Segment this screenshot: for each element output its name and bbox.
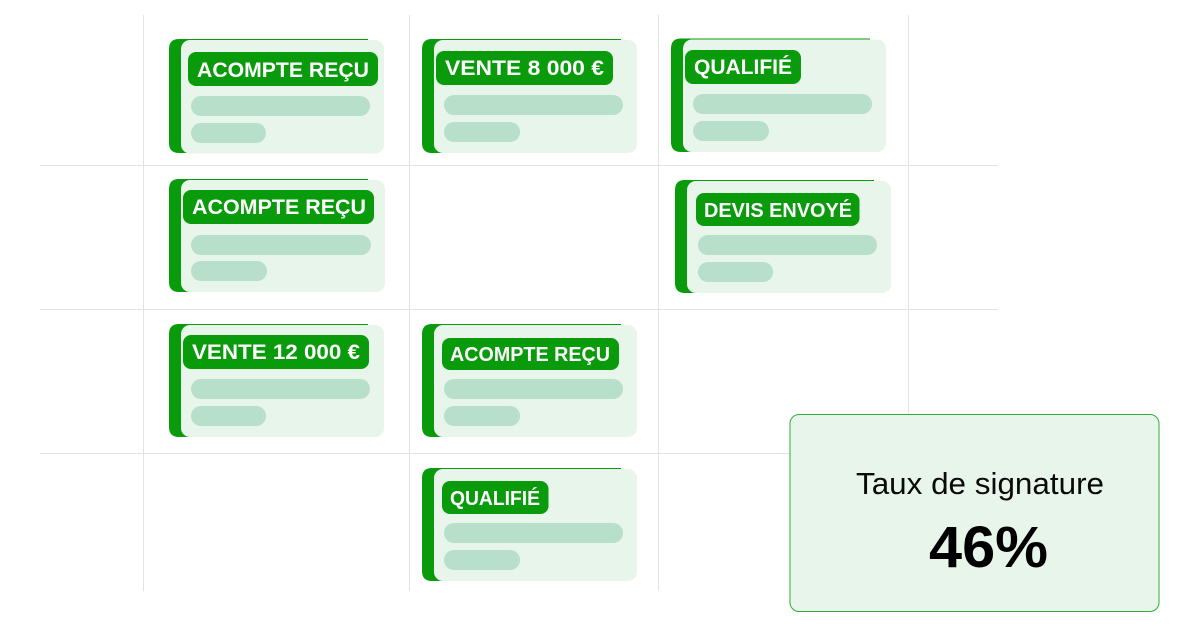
card: acompte reçu, row 1 column 1 bbox=[169, 39, 384, 154]
card: qualifié, row 1 column 3 bbox=[671, 38, 886, 152]
callout: taux de signature bbox=[790, 414, 1159, 612]
card: qualifié, row 4 column 2 bbox=[422, 468, 637, 581]
card: acompte reçu, row 2 column 1: ACOMPTE REÇU bbox=[192, 196, 366, 219]
card: vente 12 000 €, row 3 column 1: VENTE 12 000 € bbox=[192, 341, 360, 364]
callout value: 46% bbox=[929, 515, 1048, 580]
card: vente 8 000 €, row 1 column 2 bbox=[422, 39, 637, 153]
card: devis envoyé, row 2 column 3: DEVIS ENVOYÉ bbox=[704, 199, 852, 222]
card: qualifié, row 1 column 3: QUALIFIÉ bbox=[694, 56, 792, 79]
card: acompte reçu, row 1 column 1: ACOMPTE REÇU bbox=[197, 59, 369, 82]
card: qualifié, row 4 column 2: QUALIFIÉ bbox=[450, 487, 540, 510]
card: devis envoyé, row 2 column 3 bbox=[675, 180, 891, 293]
card: acompte reçu, row 3 column 2: ACOMPTE REÇU bbox=[450, 344, 610, 366]
card: vente 12 000 €, row 3 column 1 bbox=[169, 324, 384, 437]
card: acompte reçu, row 3 column 2 bbox=[422, 324, 637, 437]
card: vente 8 000 €, row 1 column 2: VENTE 8 000 € bbox=[445, 57, 604, 80]
card: acompte reçu, row 2 column 1 bbox=[169, 179, 385, 292]
callout label: Taux de signature bbox=[856, 466, 1104, 501]
